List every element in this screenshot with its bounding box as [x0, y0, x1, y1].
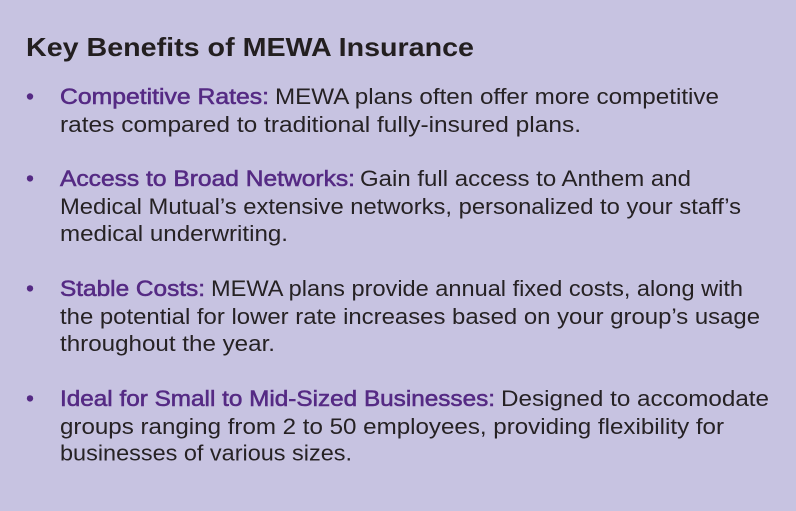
benefit: stable costs: the potential for lower rate increases based on your group’s usage	[60, 304, 760, 329]
benefit: competitive rates: rates compared to traditional fully-insured plans.	[60, 112, 581, 137]
benefit: ideal for small to mid-sized businesses: groups ranging from 2 to 50 employees, providing flexibility for	[60, 414, 724, 439]
benefit: stable costs: throughout the year.	[60, 331, 275, 356]
benefit: stable costs: MEWA plans provide annual fixed costs, along with	[211, 276, 743, 301]
benefit: competitive rates: Competitive Rates:	[60, 84, 269, 109]
benefit: stable costs	[27, 276, 760, 356]
benefit: ideal for small to mid-sized businesses: Ideal for Small to Mid-Sized Businesses:	[60, 386, 495, 411]
benefit: access to broad networks	[27, 166, 741, 246]
benefit: ideal for small to mid-sized businesses: Designed to accomodate	[501, 386, 769, 411]
benefit: competitive rates: MEWA plans often offer more competitive	[275, 84, 719, 109]
benefit: access to broad networks: Medical Mutual’s extensive networks, personalized to your staff’s	[60, 194, 741, 219]
benefit: competitive rates	[27, 84, 719, 137]
benefit: ideal for small to mid-sized businesses	[27, 386, 769, 466]
benefit: access to broad networks: Gain full access to Anthem and	[360, 166, 691, 191]
benefit: access to broad networks: Access to Broad Networks:	[60, 166, 355, 191]
benefit: ideal for small to mid-sized businesses: businesses of various sizes.	[60, 440, 352, 466]
title: Key Benefits of MEWA Insurance	[26, 32, 474, 62]
benefit: stable costs: Stable Costs:	[60, 276, 205, 301]
benefit: access to broad networks: medical underwriting.	[60, 221, 288, 246]
